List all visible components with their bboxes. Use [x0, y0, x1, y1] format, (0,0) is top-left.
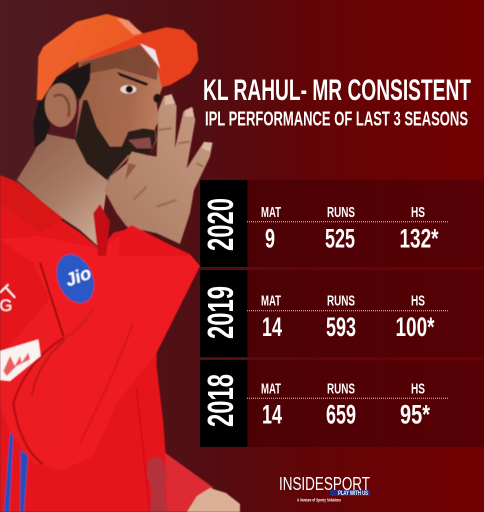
lower hand	[187, 488, 240, 512]
stat values: 2018: 659	[326, 400, 356, 430]
hair	[33, 63, 91, 148]
stat labels: 2020: RUNS	[327, 204, 355, 221]
stat labels: 2019	[261, 293, 425, 310]
stat values: 2018: 95*	[400, 400, 430, 430]
year tab: 2020	[200, 180, 248, 267]
logo: InsideSport	[279, 474, 370, 502]
stat values: 2020: 132*	[400, 224, 439, 254]
stat values: 2019	[262, 312, 435, 342]
year tab: 2020: 2020	[200, 198, 241, 251]
year tab: 2019: 2019	[200, 286, 241, 339]
blue stripes	[4, 433, 13, 512]
stat values: 2018: 14	[262, 400, 282, 430]
year tab: 2019	[200, 270, 248, 357]
face	[75, 45, 162, 180]
stat labels: 2020: HS	[411, 204, 425, 221]
stat labels: 2019: RUNS	[327, 293, 355, 310]
stat labels: 2020: MAT	[261, 204, 281, 221]
jio badge	[50, 249, 101, 309]
stat values: 2020: 9	[265, 224, 275, 254]
year tab: 2018: 2018	[200, 374, 241, 427]
panel: 2018 season	[200, 360, 484, 447]
forehead shadow	[80, 45, 158, 80]
panel: 2020 season	[200, 180, 484, 267]
logo: InsideSport: INSIDESPORT	[279, 474, 370, 494]
sponsor patch	[0, 339, 41, 381]
stat values: 2019: 593	[326, 312, 356, 342]
ear	[45, 83, 77, 127]
stat values: 2019: 100*	[396, 312, 435, 342]
stat values: 2020: 525	[325, 224, 355, 254]
stat labels: 2018	[261, 380, 425, 398]
stat labels: 2019: HS	[411, 293, 425, 310]
jio badge: Jio	[63, 263, 94, 290]
stat labels: 2018: HS	[411, 380, 425, 398]
neck, head and hand	[0, 14, 213, 256]
torso and sleeve	[0, 179, 213, 512]
collar	[0, 175, 63, 232]
beard	[75, 100, 156, 180]
stat labels: 2019: MAT	[261, 293, 281, 310]
panel: 2019 season	[200, 270, 484, 357]
cap	[37, 14, 198, 100]
neck	[17, 133, 108, 247]
player illustration	[0, 14, 240, 512]
stat values: 2019: 14	[262, 312, 282, 342]
year tab: 2018	[200, 360, 248, 447]
lips	[128, 137, 152, 148]
eyes and brow	[117, 72, 161, 103]
stat values: 2018	[262, 400, 430, 430]
team crest	[147, 456, 168, 512]
stat labels: 2018: MAT	[261, 380, 281, 398]
logo tagline band: PLAY WITH US	[338, 491, 368, 497]
stat labels: 2020	[261, 204, 425, 221]
hand	[104, 94, 213, 244]
logo caption: A Venture of Sporty Solutions	[297, 498, 341, 502]
stat values: 2020	[265, 224, 439, 254]
stat labels: 2018: RUNS	[327, 380, 355, 398]
right sleeve cuff	[118, 225, 192, 256]
